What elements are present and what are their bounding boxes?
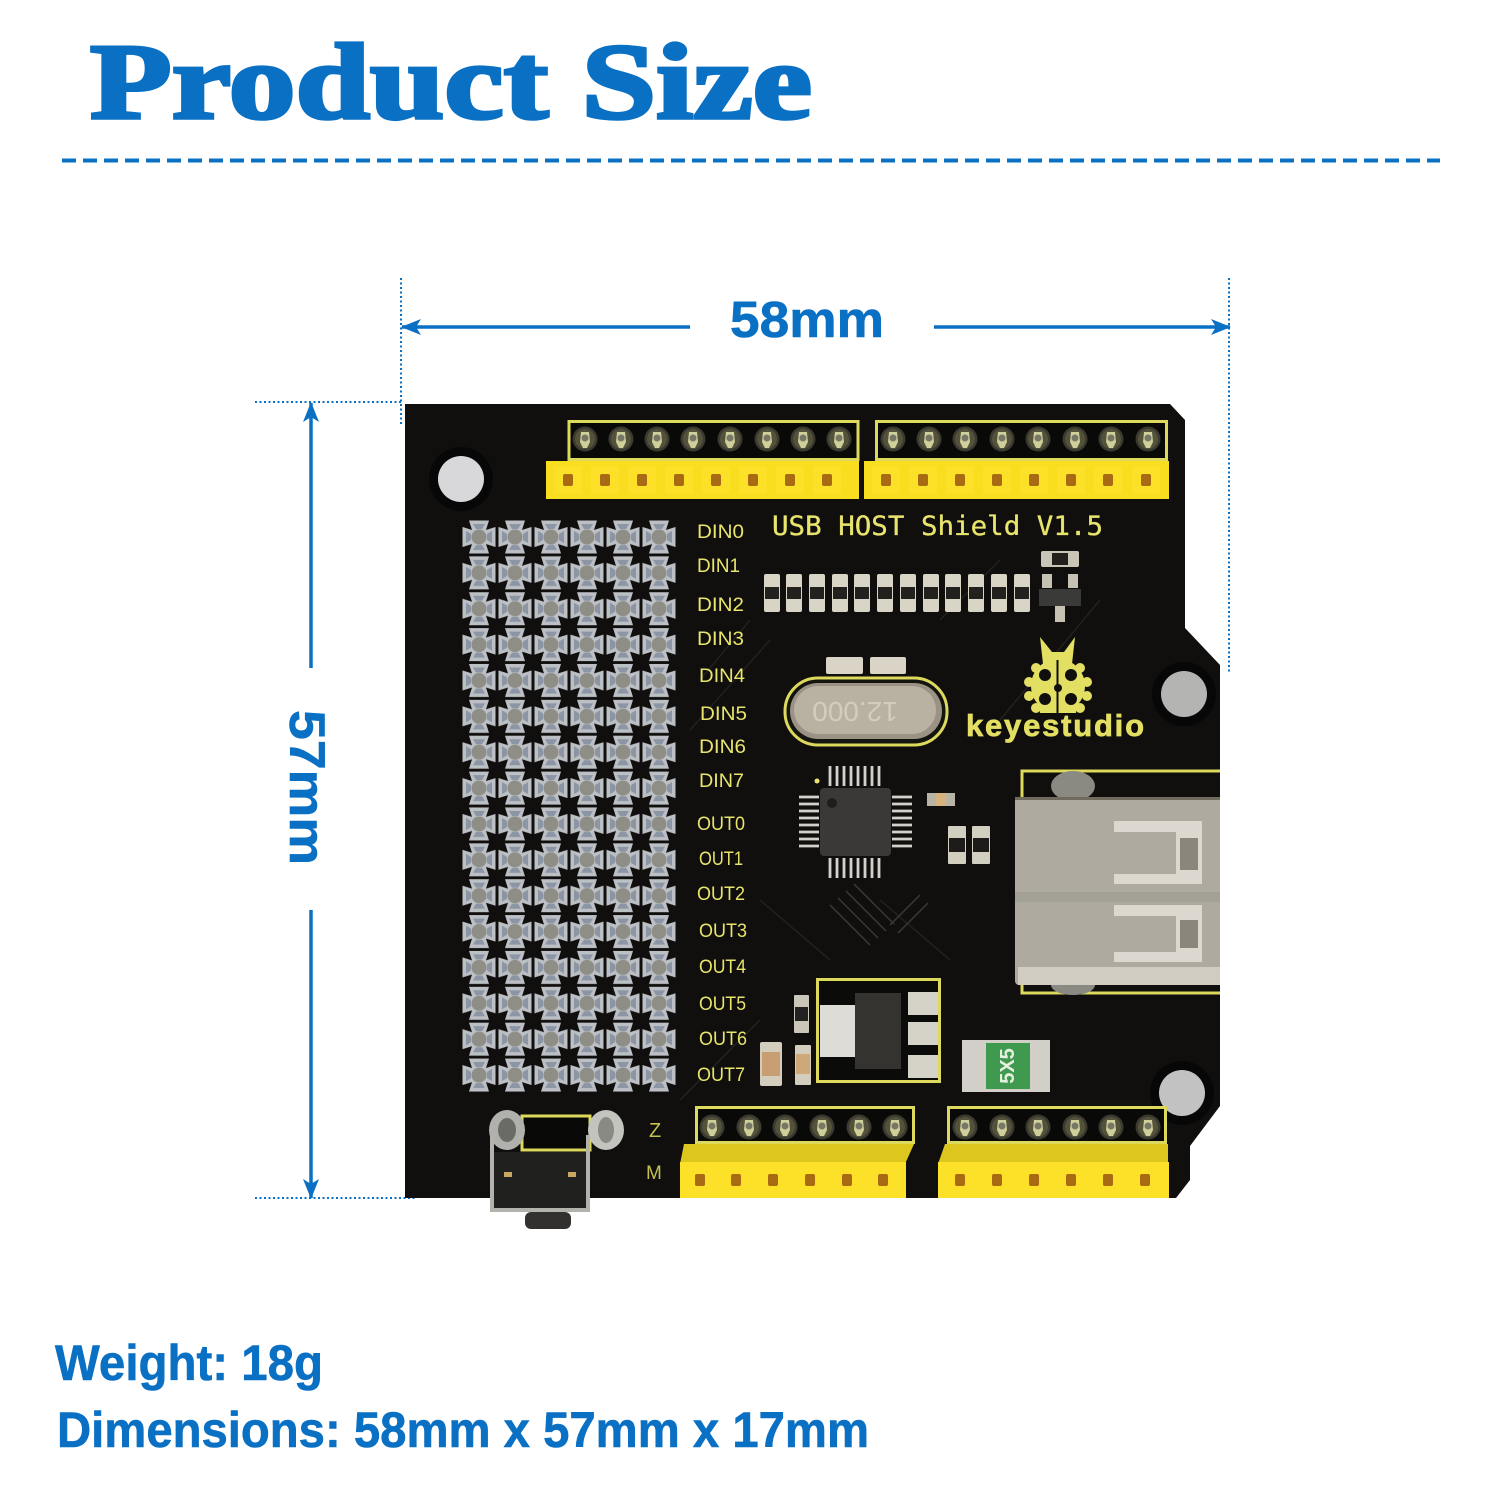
pin labels: OUT7 — [697, 1065, 745, 1086]
board name: USB HOST Shield V1.5 — [772, 511, 1103, 542]
width dimension: 58mm: 58mm — [730, 291, 884, 348]
microcontroller chip — [799, 766, 912, 878]
Z and M silk labels: M — [646, 1163, 662, 1184]
transistor — [1039, 551, 1081, 622]
brand logo: ladybug and keyestudio: keyestudio — [966, 708, 1144, 743]
fuse: 5X5 — [997, 1048, 1019, 1084]
bottom-right pin header — [938, 1108, 1169, 1198]
top-left pin header solder row — [569, 422, 858, 460]
pin labels: DIN5 — [700, 704, 747, 725]
top-right yellow header — [864, 461, 1169, 499]
pin labels: OUT6 — [699, 1029, 747, 1050]
weight text: Weight: 18g — [55, 1335, 323, 1391]
pin labels: OUT5 — [699, 994, 746, 1015]
pin labels: DIN2 — [697, 595, 744, 616]
pin labels: DIN3 — [697, 629, 744, 650]
crystal — [785, 657, 947, 745]
pin labels: OUT0 — [697, 814, 745, 835]
USB socket — [1015, 771, 1220, 995]
pin labels: OUT1 — [699, 849, 743, 870]
fuse — [962, 1040, 1050, 1092]
height dimension: 57mm: 57mm — [279, 710, 335, 865]
crystal: 12.000 — [812, 696, 898, 727]
small capacitors — [760, 995, 811, 1086]
prototyping pad grid — [461, 519, 677, 1093]
mounting holes — [429, 447, 1216, 1125]
pin labels: DIN1 — [697, 556, 740, 577]
brand logo: ladybug and keyestudio — [966, 637, 1144, 743]
top-left yellow header — [546, 461, 859, 499]
resistor row — [764, 574, 1030, 612]
title: Product Size — [90, 23, 812, 142]
Z and M silk labels — [646, 1120, 662, 1184]
dimensions text: Dimensions: 58mm x 57mm x 17mm — [57, 1402, 869, 1458]
pin labels — [697, 522, 747, 1086]
pin labels: DIN6 — [699, 737, 746, 758]
bottom-left pin header — [680, 1108, 914, 1198]
tactile switch — [489, 1110, 624, 1229]
panel: shield board — [405, 404, 1220, 1229]
pin labels: OUT2 — [697, 884, 745, 905]
icon: ladybug — [1024, 637, 1092, 714]
pin labels: OUT3 — [699, 921, 747, 942]
pin labels: DIN4 — [699, 666, 745, 687]
Z and M silk labels: Z — [649, 1120, 661, 1142]
voltage regulator — [818, 980, 940, 1082]
pin labels: DIN7 — [699, 771, 744, 792]
LED and small components — [927, 793, 990, 864]
board outline — [405, 404, 1220, 1198]
pin labels: DIN0 — [697, 522, 744, 543]
top-right pin header solder row — [876, 422, 1166, 460]
pin labels: OUT4 — [699, 957, 746, 978]
